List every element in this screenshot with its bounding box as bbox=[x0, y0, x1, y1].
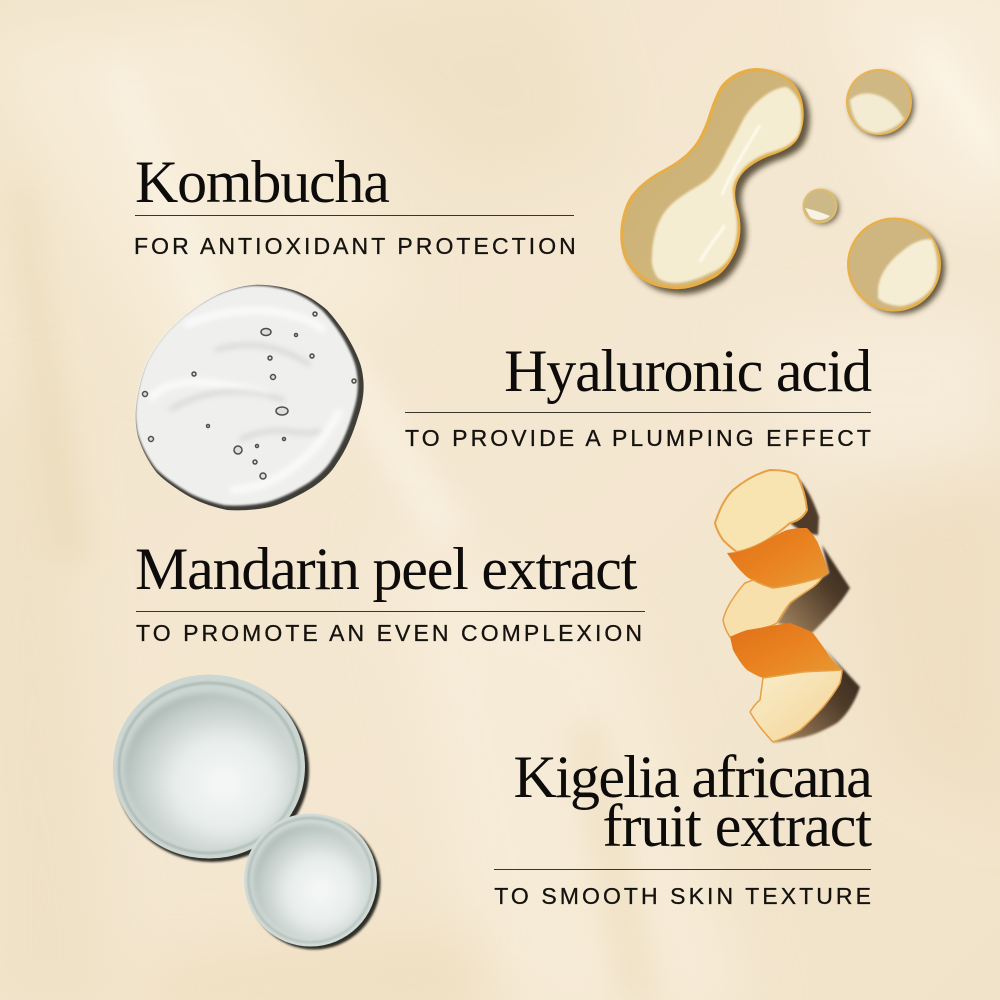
peel curl top bbox=[715, 470, 807, 552]
divider: Hyaluronic bbox=[405, 412, 871, 413]
heading: Kigelia africana fruit extract: fruit extract bbox=[602, 793, 871, 859]
subheading: plumping: TO PROVIDE A PLUMPING EFFECT bbox=[405, 425, 874, 451]
heading: Kombucha: Kombucha bbox=[135, 149, 389, 215]
subheading: complexion: TO PROMOTE AN EVEN COMPLEXION bbox=[136, 620, 645, 646]
heading: Hyaluronic acid: Hyaluronic acid bbox=[504, 338, 871, 404]
divider: Kombucha bbox=[135, 215, 574, 216]
divider: Mandarin bbox=[136, 611, 645, 612]
droplet small bbox=[802, 188, 838, 224]
small droplet bbox=[244, 814, 380, 950]
subheading: antioxidant: FOR ANTIOXIDANT PROTECTION bbox=[134, 233, 579, 259]
divider: Kigelia bbox=[494, 869, 871, 870]
gel bubbles bbox=[142, 312, 356, 479]
large droplet bbox=[113, 674, 309, 862]
oil blob bbox=[620, 68, 804, 289]
peel shadows bbox=[773, 477, 860, 743]
droplet top right bbox=[846, 69, 912, 135]
peel curl bottom bbox=[750, 670, 842, 742]
heading: Mandarin peel extract: Mandarin peel extract bbox=[135, 536, 636, 602]
peel curl middle bbox=[723, 577, 822, 637]
droplet lower right bbox=[847, 218, 941, 312]
subheading: texture: TO SMOOTH SKIN TEXTURE bbox=[494, 883, 874, 909]
oil shadows bbox=[626, 73, 945, 314]
heading: Kigelia africana fruit extract bbox=[513, 744, 872, 859]
heading: Kigelia africana fruit extract: Kigelia africana bbox=[513, 744, 871, 810]
